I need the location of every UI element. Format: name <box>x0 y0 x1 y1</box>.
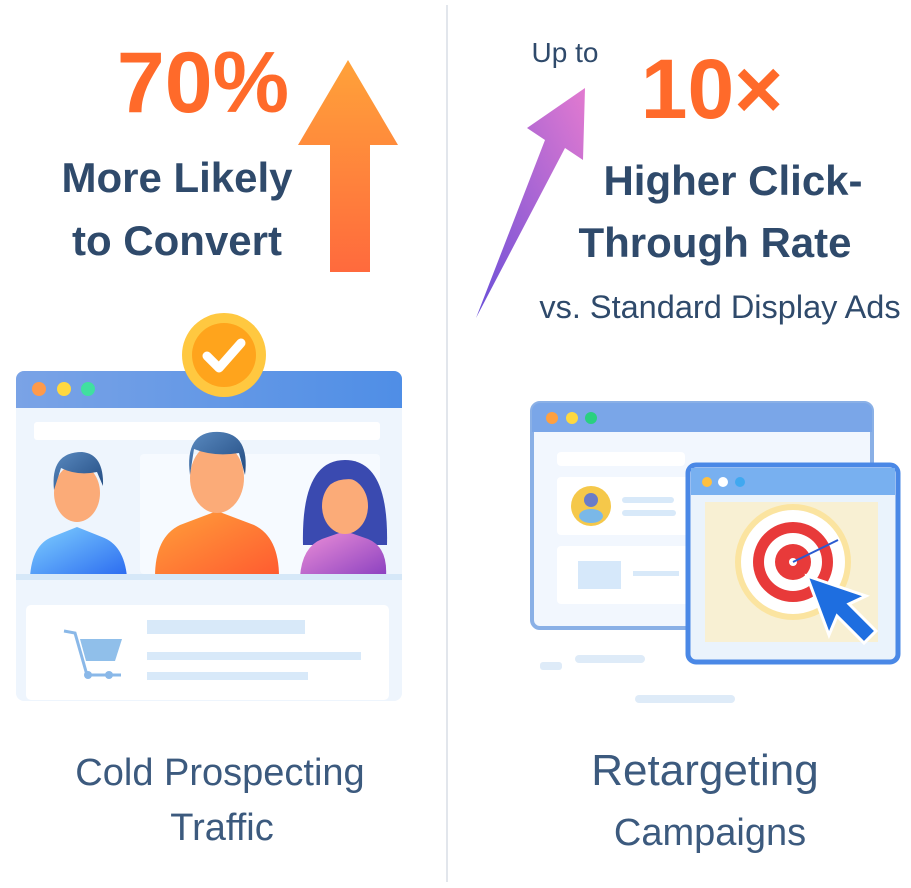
label: Cold Prospecting Traffic <box>75 752 365 849</box>
label: Cold Prospecting Traffic: Traffic <box>170 807 274 849</box>
text: More Likely to Convert: to Convert <box>72 217 282 264</box>
illustration: cold prospecting browser <box>16 313 402 701</box>
label: Retargeting Campaigns: Retargeting <box>591 746 819 795</box>
text: Up to: Up to <box>532 37 598 68</box>
person: right woman <box>300 460 387 577</box>
text: Higher Click-Through Rate <box>579 157 863 266</box>
text: More Likely to Convert <box>61 154 293 264</box>
right stat block <box>532 37 901 325</box>
front browser <box>688 465 898 662</box>
illustration: retargeting browsers <box>532 403 898 703</box>
label: Retargeting Campaigns: Campaigns <box>614 812 806 854</box>
back browser <box>532 403 872 628</box>
text: More Likely to Convert: More Likely <box>61 154 293 201</box>
left stat block <box>61 35 293 264</box>
arrow: orange up <box>298 60 398 272</box>
text: Higher Click-Through Rate: Higher Click- <box>603 157 863 204</box>
card: cart <box>26 605 389 700</box>
stat: 70%: 70% <box>117 35 289 131</box>
icon: check coin <box>182 313 266 397</box>
text: Higher Click-Through Rate: Through Rate <box>579 219 851 266</box>
label: Retargeting Campaigns <box>591 746 819 854</box>
person: middle man <box>155 432 279 577</box>
stat: 10x: 10× <box>641 42 783 136</box>
person: left man <box>30 452 127 577</box>
divider <box>446 5 448 882</box>
icon: cursor <box>807 576 876 643</box>
icon: target <box>741 510 845 614</box>
label: Cold Prospecting Traffic: Cold Prospecting <box>75 752 365 794</box>
arrow: purple diagonal <box>476 88 585 318</box>
text: vs. Standard Display Ads: vs. Standard Display Ads <box>539 289 901 325</box>
